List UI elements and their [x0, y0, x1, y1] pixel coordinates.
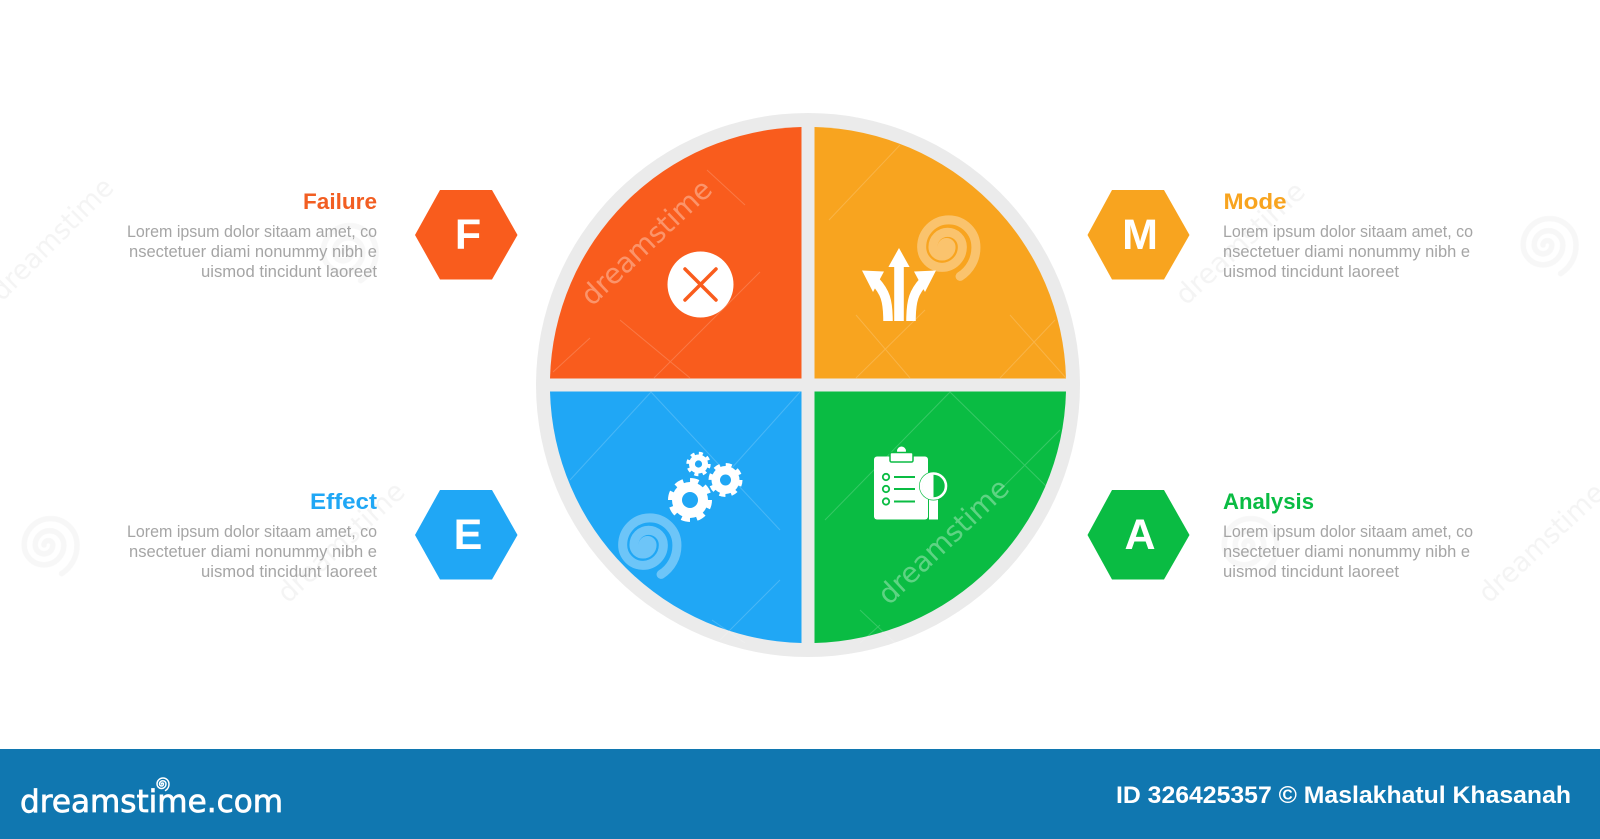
watermarks on white background	[0, 170, 1600, 609]
panel: analysis	[1088, 489, 1473, 581]
body text: failure	[127, 222, 377, 281]
icon: x in circle	[668, 252, 734, 318]
heading: mode: Mode	[1224, 189, 1286, 214]
hexagon F	[415, 190, 518, 280]
footer banner	[0, 749, 1600, 839]
body text: analysis: nsectetuer diami nonummy nibh e	[1223, 542, 1470, 561]
hexagon M	[1088, 190, 1190, 280]
body text: mode: Lorem ipsum dolor sitaam amet, co	[1223, 222, 1473, 241]
footer logo text: dreamstime.com	[20, 784, 283, 820]
heading: failure: Failure	[303, 189, 377, 214]
body text: failure: uismod tincidunt laoreet	[201, 262, 377, 281]
body text: failure: Lorem ipsum dolor sitaam amet, co	[127, 222, 377, 241]
body text: effect	[127, 522, 377, 581]
watermark: spiral on orange	[922, 220, 976, 276]
letter E: E	[454, 511, 482, 559]
quadrant: mode	[814, 127, 1066, 378]
footer logo spiral	[157, 778, 169, 790]
body text: mode	[1223, 222, 1473, 281]
footer credit: ID 326425357 © Maslakhatul Khasanah	[1116, 782, 1571, 809]
body text: analysis: Lorem ipsum dolor sitaam amet, co	[1223, 522, 1473, 541]
heading: analysis: Analysis	[1223, 489, 1314, 514]
circular diagram	[536, 113, 1080, 657]
letter A: A	[1124, 511, 1156, 559]
body text: mode: uismod tincidunt laoreet	[1223, 262, 1399, 281]
letter F: F	[455, 211, 481, 259]
watermarks on white background: dreamstime	[1168, 174, 1311, 311]
body text: mode: nsectetuer diami nonummy nibh e	[1223, 242, 1470, 261]
body text: analysis: uismod tincidunt laoreet	[1223, 562, 1399, 581]
watermark: dreamstime on orange-red: dreamstime	[574, 172, 719, 312]
hexagon A	[1088, 490, 1190, 580]
icon: clipboard with magnifier	[874, 446, 948, 520]
icon: gears	[670, 454, 740, 520]
body text: effect: uismod tincidunt laoreet	[201, 562, 377, 581]
letter M: M	[1122, 211, 1158, 259]
icon: diverging arrows	[862, 248, 936, 321]
body text: analysis	[1223, 522, 1473, 581]
quadrant: effect	[550, 392, 802, 643]
watermark lines	[553, 145, 1066, 643]
outer grey ring	[536, 113, 1080, 657]
heading: effect: Effect	[310, 489, 378, 514]
body text: effect: nsectetuer diami nonummy nibh e	[129, 542, 377, 561]
panel: failure	[127, 189, 518, 281]
watermarks on white background: dreamstime	[270, 475, 411, 609]
watermark: dreamstime on green: dreamstime	[871, 471, 1016, 611]
body text: effect: Lorem ipsum dolor sitaam amet, co	[127, 522, 377, 541]
body text: failure: nsectetuer diami nonummy nibh e	[129, 242, 377, 261]
panel: effect	[127, 489, 518, 581]
quadrant: failure	[550, 127, 802, 378]
watermark: spiral on blue	[623, 518, 677, 574]
panel: mode	[1088, 189, 1473, 281]
quadrant: analysis	[814, 392, 1066, 643]
hexagon E	[415, 490, 518, 580]
